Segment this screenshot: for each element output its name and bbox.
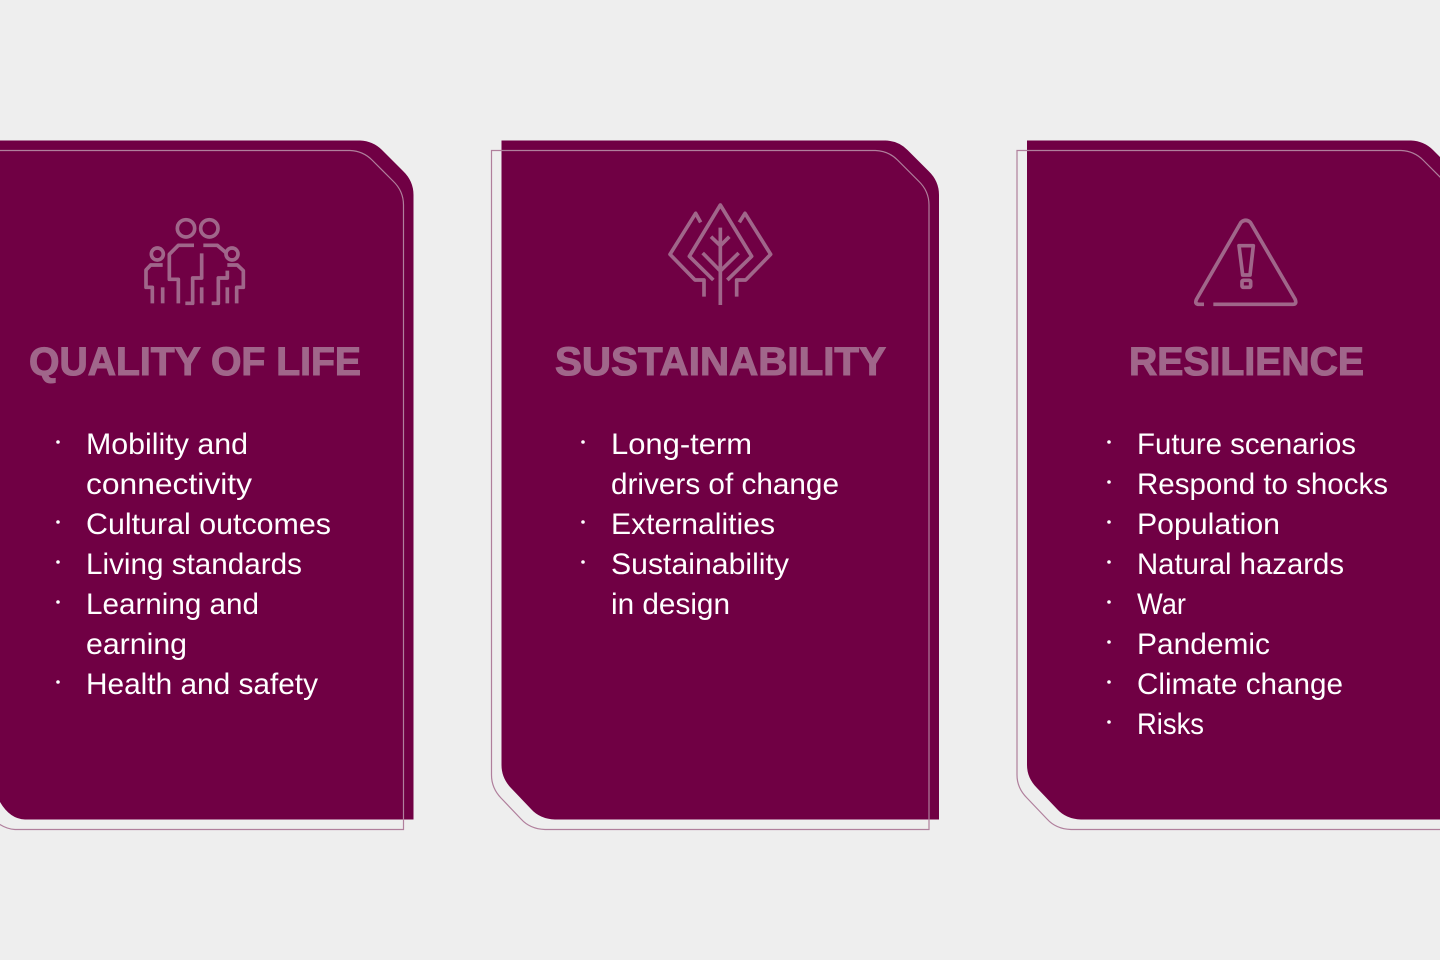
bullet list: Long-term <box>611 428 752 461</box>
panel: resilience <box>1017 140 1440 830</box>
bullet list: Sustainability <box>611 548 789 581</box>
bullet list: connectivity <box>86 468 252 501</box>
bullet list: Population <box>1137 508 1280 541</box>
panel: quality of life <box>0 140 414 830</box>
bullet list: earning <box>86 628 187 661</box>
card shape <box>502 140 939 820</box>
bullet list: Externalities <box>611 508 775 541</box>
bullet list: Living standards <box>86 548 302 581</box>
bullet list: Health and safety <box>86 668 318 701</box>
card shape <box>0 140 414 820</box>
bullet list <box>56 428 331 701</box>
heading: QUALITY OF LIFE <box>29 340 361 384</box>
bullet list <box>581 428 839 621</box>
bullet list: Future scenarios <box>1137 428 1356 461</box>
bullet list: drivers of change <box>611 468 839 501</box>
bullet list: Cultural outcomes <box>86 508 331 541</box>
icon: tree <box>670 205 771 305</box>
bullet list <box>1107 428 1388 741</box>
card shape <box>1027 140 1440 820</box>
bullet list: Risks <box>1137 708 1204 741</box>
heading: RESILIENCE <box>1129 340 1364 384</box>
heading: SUSTAINABILITY <box>555 340 886 384</box>
bullet list: Climate change <box>1137 668 1343 701</box>
bullet list: Natural hazards <box>1137 548 1344 581</box>
bullet list: Mobility and <box>86 428 248 461</box>
card outline <box>1017 150 1440 830</box>
bullet list: Learning and <box>86 588 259 621</box>
bullet list: in design <box>611 588 730 621</box>
icon: family <box>146 220 243 303</box>
icon: warning triangle <box>1196 220 1296 304</box>
bullet list: War <box>1137 588 1186 621</box>
card outline <box>492 150 929 830</box>
bullet list: Pandemic <box>1137 628 1270 661</box>
panel: sustainability <box>492 140 939 830</box>
card outline <box>0 150 404 830</box>
bullet list: Respond to shocks <box>1137 468 1388 501</box>
